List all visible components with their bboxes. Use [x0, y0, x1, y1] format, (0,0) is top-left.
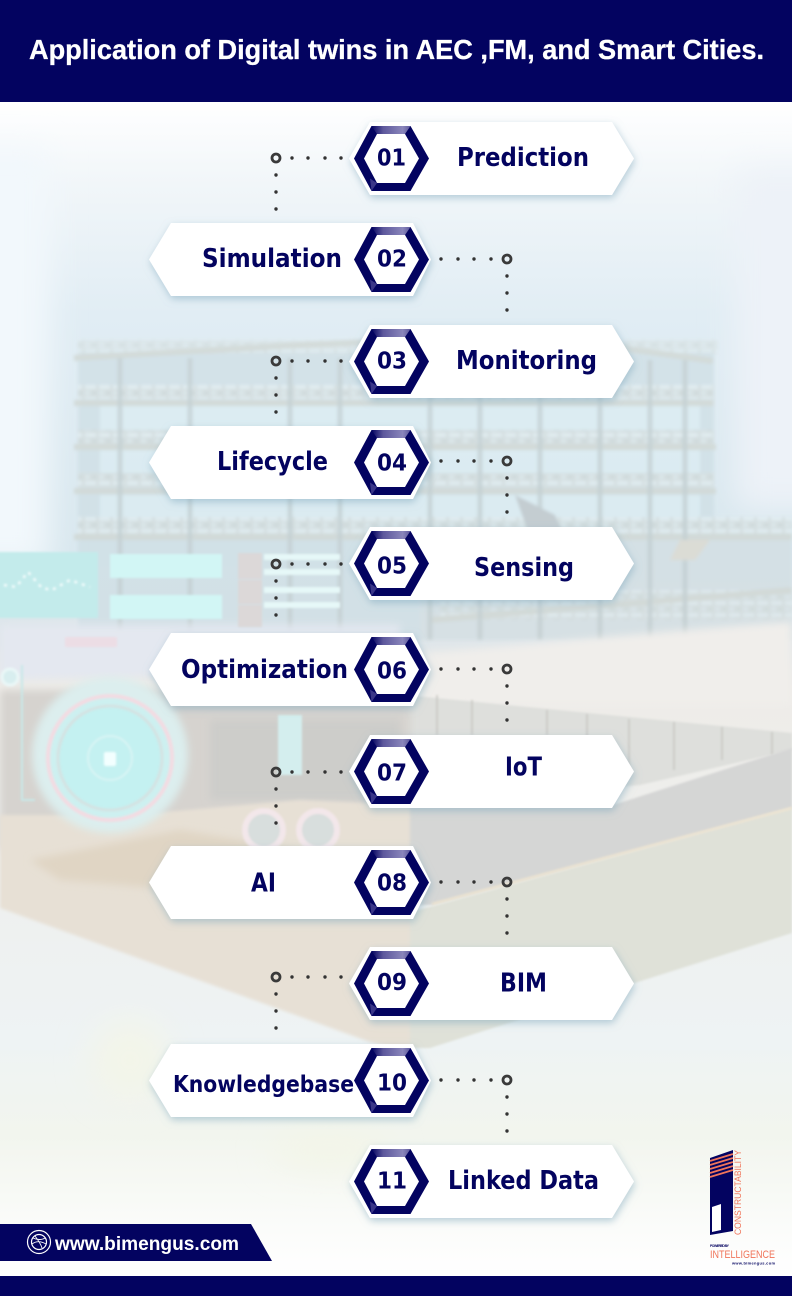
tan soil left: [0, 800, 410, 1052]
ground haze: [400, 622, 792, 705]
lower-left wall: [0, 690, 410, 850]
title: Application of Digital twins in AEC ,FM, and Smart Cities.: [29, 34, 764, 65]
item 10 Knowledgebase: 10: [377, 1070, 407, 1096]
icon: dribbble globe: [28, 1230, 50, 1254]
connector: row 08: [439, 878, 511, 935]
railings: [78, 340, 718, 354]
item 03 Monitoring: 03: [377, 348, 407, 374]
item 04 Lifecycle: [149, 426, 431, 499]
fence: [405, 695, 792, 807]
item 08 AI: AI: [251, 868, 276, 898]
item 06 Optimization: 06: [377, 658, 407, 684]
item 10 Knowledgebase: Knowledgebase: [173, 1072, 354, 1098]
item 09 BIM: 09: [377, 970, 407, 996]
hud gauge: [2, 665, 337, 849]
connector: row 04: [439, 457, 511, 514]
item 02 Simulation: Simulation: [202, 244, 342, 274]
connector: row 02: [439, 255, 511, 312]
item 07 IoT: 07: [377, 760, 407, 786]
footer band: [0, 1276, 792, 1296]
item 02 Simulation: [149, 223, 431, 296]
slabs: [74, 335, 792, 620]
item 11 Linked Data: 11: [377, 1168, 407, 1194]
item 04 Lifecycle: 04: [377, 450, 407, 476]
item 11 Linked Data: Linked Data: [448, 1166, 599, 1196]
item 01 Prediction: Prediction: [457, 143, 589, 173]
item 04 Lifecycle: Lifecycle: [217, 447, 328, 477]
soil mound right: [400, 808, 792, 1048]
logo: Constructability: CONSTRUCTABILITY: [733, 1149, 744, 1235]
item 08 AI: 08: [377, 870, 407, 896]
website badge: www.bimengus.com: [54, 1234, 239, 1255]
logo: Constructability: [710, 1149, 775, 1266]
item 06 Optimization: [149, 633, 431, 706]
connector: row 05: [272, 560, 343, 617]
logo: Constructability: www.bimengus.com: [731, 1260, 775, 1266]
item 07 IoT: [349, 735, 634, 808]
item 10 Knowledgebase: [149, 1044, 431, 1117]
item 01 Prediction: 01: [377, 146, 406, 172]
retaining wall: [400, 748, 792, 905]
connector: row 06: [439, 665, 511, 722]
item 07 IoT: IoT: [505, 752, 543, 782]
item 03 Monitoring: Monitoring: [456, 346, 597, 376]
website badge: [0, 1224, 272, 1261]
hud panels: [0, 552, 340, 647]
item 02 Simulation: 02: [377, 246, 407, 272]
connector: row 10: [439, 1076, 511, 1133]
columns: [120, 350, 685, 640]
connector: row 03: [272, 357, 343, 414]
item 11 Linked Data: [349, 1145, 634, 1218]
connector: row 07: [272, 768, 343, 825]
item 03 Monitoring: [349, 325, 634, 398]
item 01 Prediction: [349, 122, 634, 195]
building body: [74, 335, 792, 640]
item 09 BIM: BIM: [500, 968, 547, 998]
connector: row 09: [272, 973, 343, 1030]
logo: Constructability: POWERED BY: [710, 1244, 730, 1248]
item 08 AI: [149, 846, 431, 919]
header band: [0, 0, 792, 102]
pale green haze low: [90, 1020, 170, 1100]
item 05 Sensing: 05: [377, 554, 407, 580]
item 05 Sensing: Sensing: [474, 553, 574, 583]
item 09 BIM: [349, 947, 634, 1020]
connector: row 01: [272, 154, 343, 211]
item 05 Sensing: [349, 527, 634, 600]
logo: Constructability: INTELLIGENCE: [710, 1249, 775, 1261]
item 06 Optimization: Optimization: [181, 655, 348, 685]
side washes: [0, 150, 50, 570]
